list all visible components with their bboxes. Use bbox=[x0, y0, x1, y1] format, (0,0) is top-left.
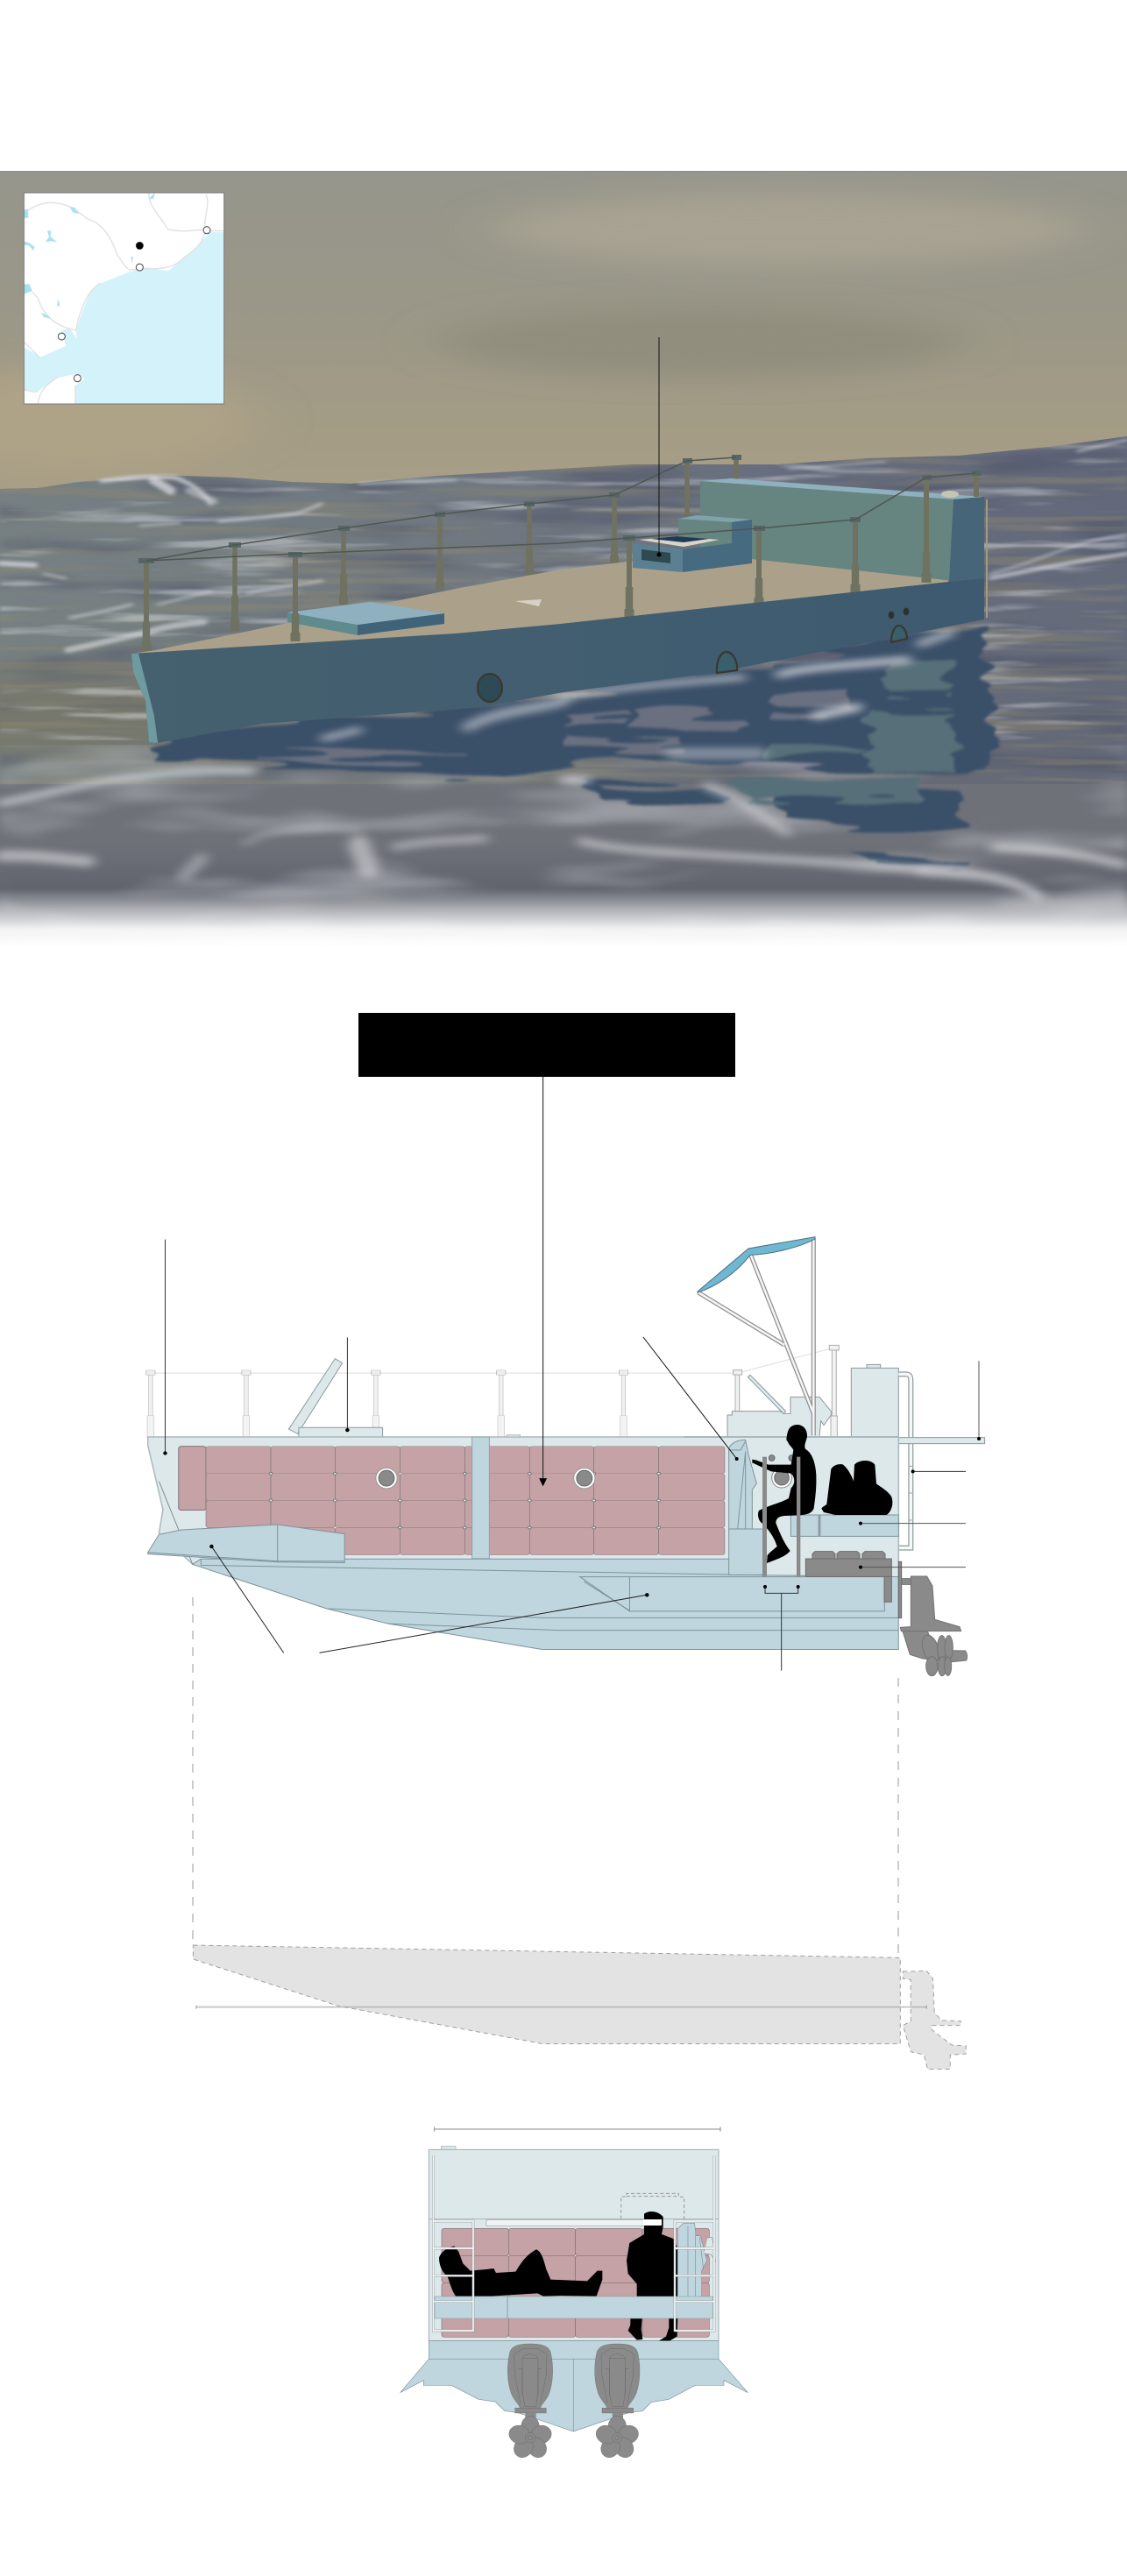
canopy bbox=[698, 1237, 815, 1292]
map land bbox=[24, 193, 224, 404]
stern ladder bbox=[898, 1374, 912, 1548]
leader: battery box bbox=[859, 1566, 966, 1569]
rear rail posts bbox=[734, 1345, 839, 1437]
fade to white bbox=[0, 888, 1127, 946]
silhouette: seated passengers bbox=[821, 1461, 892, 1515]
map lakes bbox=[24, 193, 155, 319]
boat bbox=[131, 337, 987, 743]
central frame bbox=[472, 1437, 489, 1559]
tank cap bbox=[441, 2146, 456, 2149]
hull plan, waterline shadow bbox=[193, 1945, 966, 2070]
stern tank bbox=[851, 1364, 898, 1437]
map frame bbox=[24, 193, 224, 404]
locator map bbox=[24, 193, 224, 404]
overhead beam bbox=[486, 2219, 662, 2226]
deck hatch bbox=[287, 602, 444, 635]
support pillars bbox=[762, 1457, 800, 1576]
map markers: towns bbox=[58, 227, 210, 382]
leader: bow hull bbox=[163, 1240, 167, 1455]
far rail posts bbox=[235, 457, 736, 631]
leader: fuel tank bbox=[320, 1593, 649, 1652]
battery panels in hold bbox=[179, 1447, 725, 1555]
title box bbox=[358, 1013, 735, 1077]
length dimension line bbox=[196, 2006, 926, 2009]
silhouette: lying person bbox=[439, 2246, 602, 2296]
bench bbox=[435, 2296, 712, 2318]
map marker: main location bbox=[136, 242, 144, 250]
stern transom block bbox=[949, 497, 984, 582]
stern view of boat bbox=[400, 2127, 748, 2461]
hull bbox=[131, 578, 984, 743]
outboard engines bbox=[507, 2344, 641, 2461]
portholes bbox=[478, 608, 909, 702]
upper wall bbox=[429, 2149, 719, 2341]
gauges bbox=[769, 1455, 795, 1461]
panel joints bbox=[269, 1472, 661, 1529]
canopy struts bbox=[698, 1238, 813, 1435]
life jacket bbox=[677, 2223, 716, 2311]
dashed console outline bbox=[621, 2193, 684, 2219]
shaded outboard profile bbox=[903, 1971, 966, 2070]
rail caps bbox=[138, 455, 982, 563]
leader: life jacket bbox=[643, 1337, 739, 1461]
beam dimension line bbox=[435, 2127, 720, 2132]
silhouette: seated person bbox=[627, 2212, 677, 2296]
bench bbox=[790, 1515, 898, 1536]
portholes bbox=[376, 1468, 595, 1489]
right stern ladder bbox=[675, 2155, 714, 2331]
leader: ladder bbox=[911, 1469, 966, 1473]
helm roof box bbox=[727, 1397, 831, 1437]
engine battery box bbox=[805, 1552, 891, 1602]
sky bbox=[0, 170, 1127, 504]
leader line to console bbox=[657, 337, 661, 557]
leader: bench bbox=[859, 1522, 966, 1525]
upper hull bbox=[148, 1437, 898, 1582]
console with life jacket bbox=[729, 1440, 763, 1575]
lower hull bbox=[193, 1559, 898, 1649]
side elevation of boat bbox=[146, 1074, 985, 1676]
boarding step bbox=[898, 1438, 985, 1444]
helm porthole bbox=[772, 1468, 791, 1488]
deck bbox=[131, 559, 949, 654]
rail wire bbox=[151, 1348, 833, 1373]
near wave highlights bbox=[0, 633, 1123, 896]
sea surface bbox=[0, 434, 1127, 946]
map roads and borders bbox=[24, 193, 224, 404]
outboard engine bbox=[900, 1576, 968, 1676]
silhouette: legs bbox=[628, 2318, 677, 2343]
bow locker bbox=[148, 1525, 344, 1563]
stern compartment bbox=[729, 1438, 898, 1575]
arrow from title to hold bbox=[539, 1074, 547, 1486]
boat reflection in water bbox=[151, 619, 995, 863]
near rail posts bbox=[146, 473, 976, 651]
battery panels bbox=[442, 2228, 709, 2337]
hero scene: boat at sea bbox=[0, 170, 1127, 946]
forward hatch lid bbox=[288, 1359, 383, 1437]
rail wires bbox=[146, 457, 976, 561]
leader: bow locker bbox=[209, 1545, 284, 1652]
leader: boarding step bbox=[977, 1361, 981, 1440]
windscreen bbox=[748, 1375, 786, 1413]
transom plate bbox=[898, 1561, 902, 1618]
shaded hull profile bbox=[193, 1945, 900, 2044]
rail posts bbox=[146, 1370, 742, 1437]
map sea bbox=[24, 232, 224, 404]
stern bench wall bbox=[700, 478, 984, 581]
left stern ladder bbox=[433, 2155, 473, 2331]
under-deck fuel tank bbox=[580, 1577, 884, 1611]
helm console bbox=[633, 515, 752, 572]
leader: pillars bracket bbox=[763, 1585, 800, 1671]
leader: hatch bbox=[345, 1337, 350, 1432]
eye-level bar bbox=[643, 2219, 662, 2226]
lower hull bbox=[400, 2341, 748, 2431]
dashed projection lines bbox=[193, 1597, 898, 1954]
silhouette: helmsman bbox=[752, 1425, 816, 1563]
far wave highlights bbox=[0, 440, 1127, 650]
